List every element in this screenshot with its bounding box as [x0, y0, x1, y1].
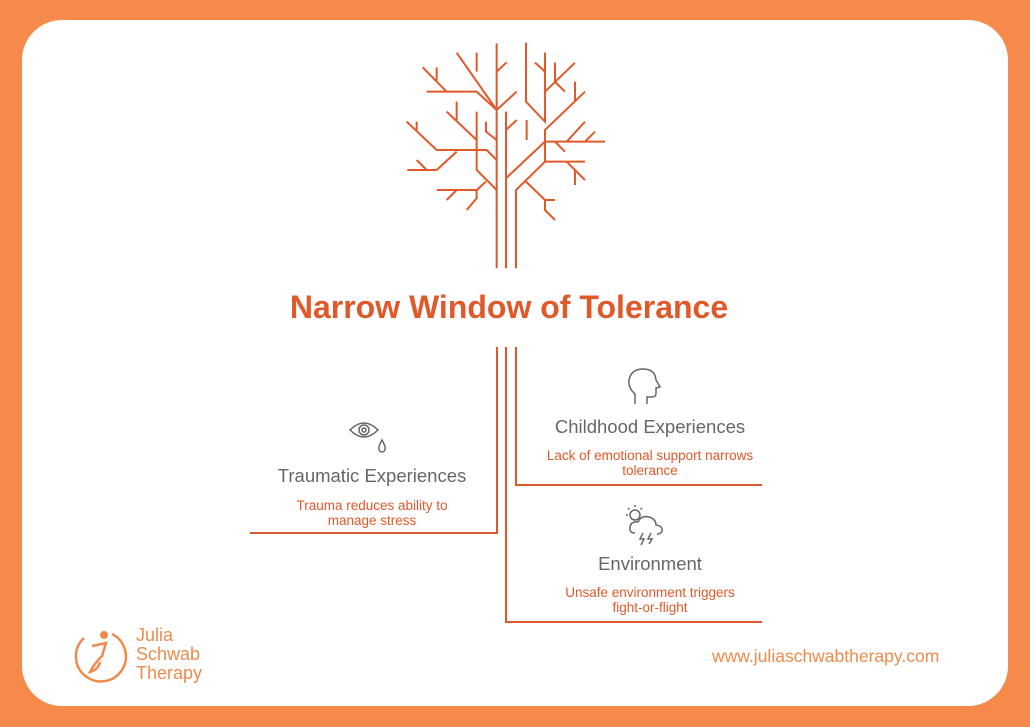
logo text: Julia [136, 625, 173, 645]
text: environment: Environment [598, 553, 702, 574]
text: environment [565, 553, 735, 615]
title: Narrow Window of Tolerance [290, 289, 728, 325]
text: traumatic experiences: Trauma reduces ability to [296, 498, 448, 513]
text: environment: Unsafe environment triggers [565, 585, 735, 600]
icon: logo mark [74, 631, 128, 683]
text: childhood experiences: Childhood Experiences [555, 416, 745, 437]
icon: head [628, 368, 662, 404]
icon: eye with tear [349, 422, 386, 453]
website url: www.juliaschwabtherapy.com [712, 646, 939, 666]
logo text [136, 625, 202, 683]
logo text: Schwab [136, 644, 200, 664]
text: childhood experiences: tolerance [622, 463, 678, 478]
logo [74, 625, 202, 683]
text: environment: fight-or-flight [612, 600, 688, 615]
logo text: Therapy [136, 663, 202, 683]
text: childhood experiences: Lack of emotional support narrows [547, 448, 753, 463]
text: traumatic experiences [278, 465, 466, 528]
icon: storm cloud with sun [626, 505, 663, 546]
connector lines [250, 347, 762, 622]
text: traumatic experiences: manage stress [328, 513, 416, 528]
tree [407, 43, 605, 268]
text: traumatic experiences: Traumatic Experiences [278, 465, 466, 486]
text: childhood experiences [547, 416, 753, 478]
